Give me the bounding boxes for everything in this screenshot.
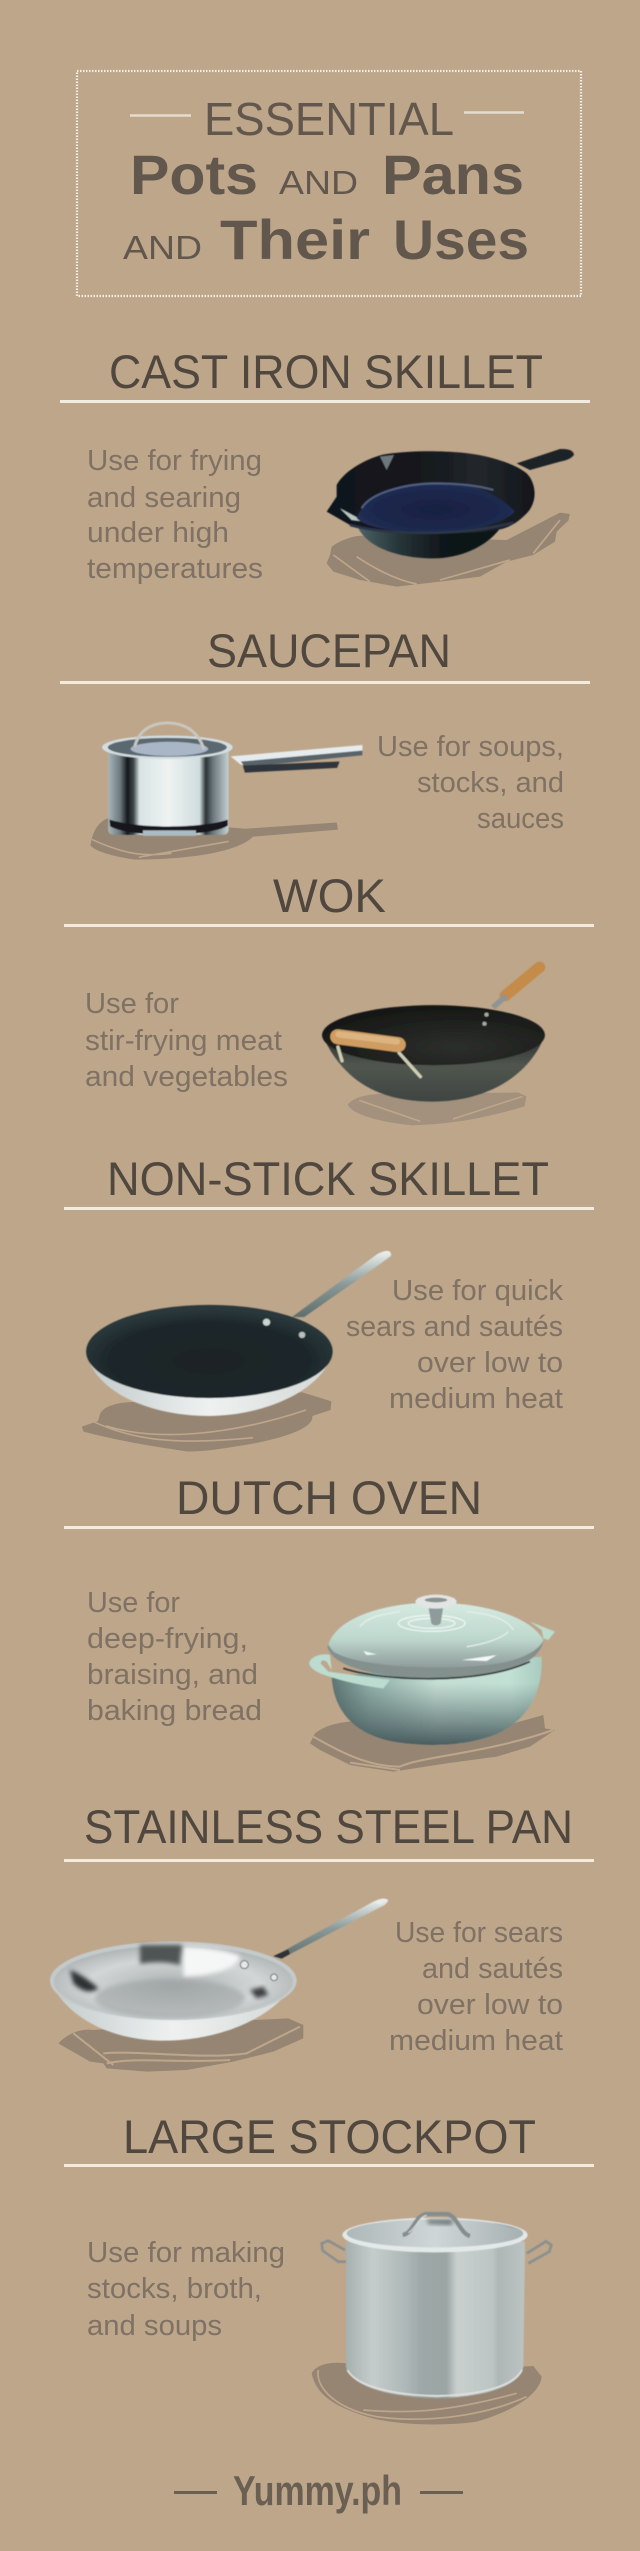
panel: large stockpot: [64, 2110, 594, 2424]
text: stockpot use: stocks, broth,: [87, 2273, 262, 2305]
title: and their uses: [123, 208, 529, 271]
icon: dutch oven: [309, 1595, 555, 1772]
panel: cast iron skillet: [60, 345, 590, 587]
text: saucepan use: [377, 731, 564, 835]
text: non-stick use: [346, 1275, 563, 1415]
title: and their uses: AND: [123, 229, 202, 266]
title: pots and pans: [130, 143, 524, 206]
text: cast iron use: temperatures: [87, 553, 263, 585]
heading: large stockpot: LARGE STOCKPOT: [123, 2110, 536, 2163]
heading: non-stick skillet: NON-STICK SKILLET: [107, 1152, 549, 1205]
text: saucepan use: sauces: [477, 803, 564, 835]
icon: stainless steel pan: [50, 1899, 388, 2072]
title panel: [77, 71, 581, 296]
text: stockpot use: Use for making: [87, 2237, 285, 2269]
logo text: Yummy.ph: [233, 2467, 402, 2514]
heading: stainless steel pan: STAINLESS STEEL PAN: [84, 1800, 573, 1853]
title: pots and pans: AND: [279, 164, 358, 201]
icon: cast iron skillet: [327, 449, 574, 587]
panel: non-stick skillet: [64, 1152, 594, 1452]
heading: saucepan: SAUCEPAN: [207, 624, 451, 677]
text: stainless steel use: medium heat: [389, 2025, 563, 2057]
title: pots and pans: Pans: [382, 143, 524, 206]
text: dutch oven use: deep-frying,: [87, 1623, 248, 1655]
footer logo: [174, 2467, 463, 2514]
title: and their uses: Uses: [393, 208, 529, 271]
text: non-stick use: Use for quick: [392, 1275, 563, 1307]
text: stainless steel use: and sautés: [422, 1953, 563, 1985]
text: cast iron use: and searing: [87, 482, 241, 514]
text: dutch oven use: baking bread: [87, 1695, 262, 1727]
text: non-stick use: over low to: [417, 1347, 563, 1379]
text: cast iron use: [87, 445, 263, 585]
heading: cast iron skillet: CAST IRON SKILLET: [109, 345, 543, 398]
text: saucepan use: Use for soups,: [377, 731, 564, 763]
text: dutch oven use: Use for: [87, 1587, 180, 1619]
heading: wok: WOK: [273, 869, 386, 922]
panel: wok: [64, 869, 594, 1125]
panel: dutch oven: [64, 1471, 594, 1772]
panel: saucepan: [60, 624, 590, 860]
icon: non-stick skillet: [82, 1251, 391, 1452]
text: stockpot use: [87, 2237, 285, 2342]
text: stainless steel use: over low to: [417, 1989, 563, 2021]
text: wok use: stir-frying meat: [85, 1025, 282, 1057]
title: and their uses: Their: [220, 208, 370, 271]
text: cast iron use: Use for frying: [87, 445, 262, 477]
text: non-stick use: medium heat: [389, 1383, 563, 1415]
text: cast iron use: under high: [87, 517, 229, 549]
text: stockpot use: and soups: [87, 2310, 222, 2342]
text: stainless steel use: [389, 1917, 563, 2057]
text: saucepan use: stocks, and: [417, 767, 564, 799]
title: pots and pans: Pots: [130, 143, 258, 206]
panel: stainless steel pan: [50, 1800, 594, 2072]
title: essential: ESSENTIAL: [204, 93, 454, 145]
icon: saucepan: [90, 723, 362, 860]
text: dutch oven use: braising, and: [87, 1659, 258, 1691]
text: wok use: Use for: [85, 988, 179, 1020]
text: non-stick use: sears and sautés: [346, 1311, 563, 1343]
text: wok use: and vegetables: [85, 1061, 288, 1093]
icon: stockpot: [312, 2214, 551, 2424]
text: wok use: [85, 988, 288, 1093]
text: stainless steel use: Use for sears: [395, 1917, 563, 1949]
text: dutch oven use: [87, 1587, 262, 1727]
heading: dutch oven: DUTCH OVEN: [176, 1471, 482, 1524]
icon: wok: [322, 967, 545, 1125]
